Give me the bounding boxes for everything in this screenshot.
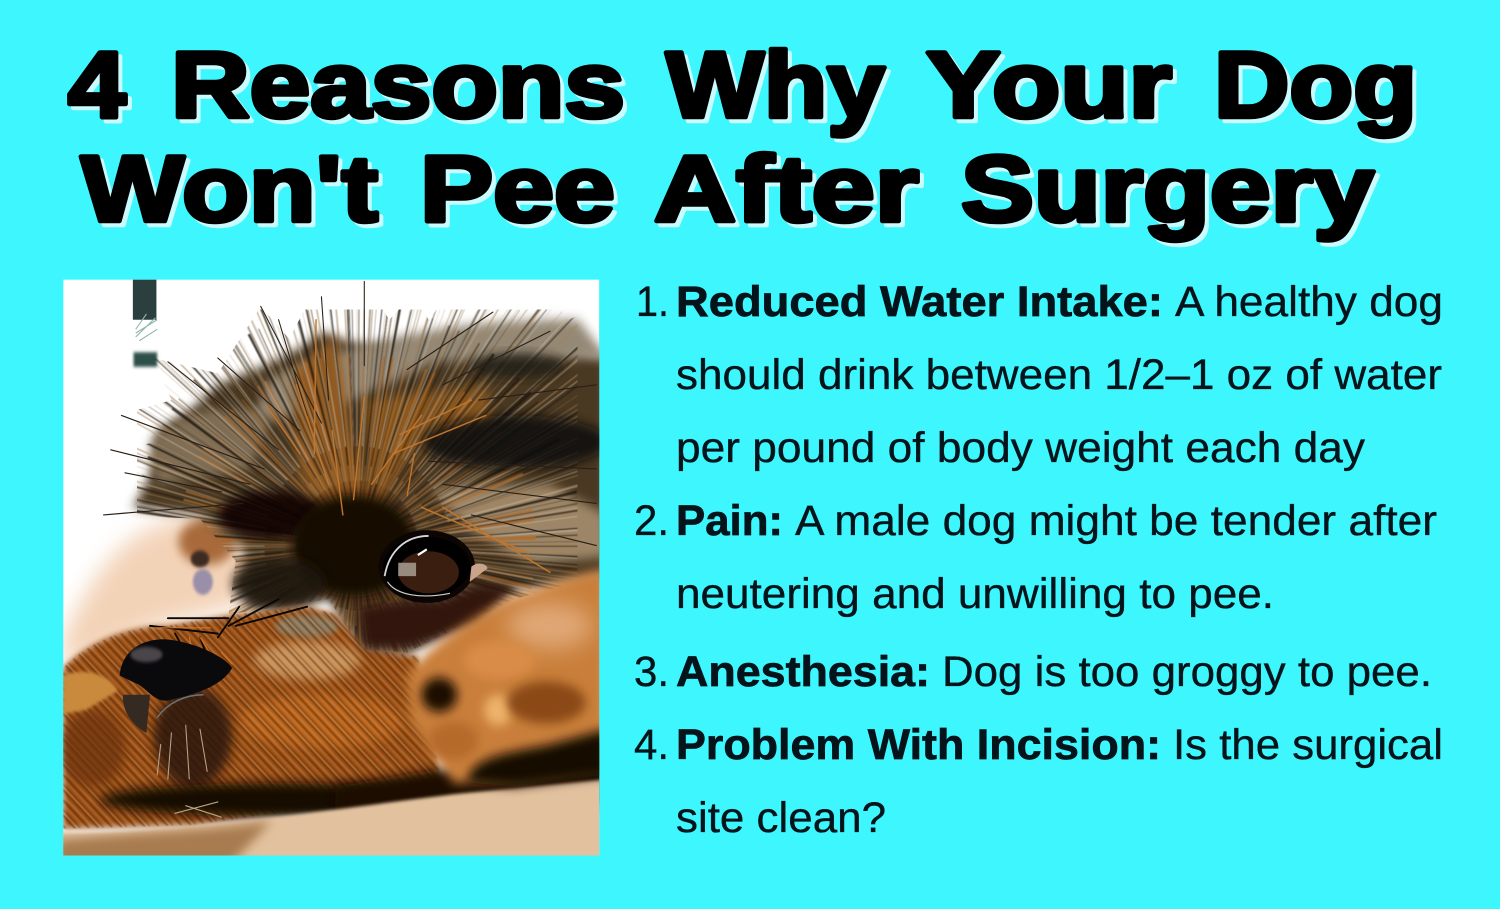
reason 3: Anesthesia: bbox=[676, 649, 930, 696]
title line 2: Pee bbox=[420, 136, 615, 241]
head fur mass bbox=[132, 331, 607, 653]
list of four reasons bbox=[634, 279, 1443, 842]
reason 3: 3. bbox=[634, 649, 669, 696]
muzzle shadows bbox=[154, 687, 232, 787]
title line 2: Pee bbox=[424, 140, 619, 245]
lighter top fur tint bbox=[250, 319, 607, 423]
rug bbox=[63, 778, 600, 856]
reason 4: 4. bbox=[634, 722, 669, 769]
title line 1: Your bbox=[926, 32, 1172, 137]
title line 2: After bbox=[654, 136, 919, 241]
title line 2 bbox=[81, 136, 1378, 245]
reason 3: Dog is too groggy to pee. bbox=[942, 649, 1432, 696]
title line 2: Won't bbox=[81, 136, 378, 241]
title line 2: Won't bbox=[85, 140, 382, 245]
title line 2: Surgery bbox=[965, 140, 1378, 245]
reason 4: Is the surgical bbox=[1173, 722, 1443, 769]
photo: close-up of a dog resting its head bbox=[57, 280, 607, 867]
reason 1: should drink between 1/2–1 oz of water bbox=[676, 352, 1442, 399]
radial fur texture bbox=[137, 310, 578, 652]
blurred paw bbox=[407, 568, 607, 787]
muzzle fur texture bbox=[63, 607, 443, 829]
reason 4: site clean? bbox=[676, 795, 886, 842]
reason 1: 1. bbox=[636, 279, 669, 326]
reason 2: 2. bbox=[634, 498, 669, 545]
title bbox=[68, 32, 1421, 245]
reason 2 bbox=[634, 498, 1437, 618]
title line 2: After bbox=[658, 140, 923, 245]
title line 1: Reasons bbox=[171, 32, 625, 137]
muzzle and cheek fur bbox=[63, 607, 443, 829]
shadow under the paw bbox=[334, 738, 600, 812]
reason 2: A male dog might be tender after bbox=[795, 498, 1437, 545]
title line 1: Dog bbox=[1218, 36, 1421, 141]
reason 2: Pain: bbox=[676, 498, 783, 545]
title line 1: Dog bbox=[1214, 32, 1417, 137]
blurred far ear and background fur bbox=[63, 515, 271, 668]
reason 2: neutering and unwilling to pee. bbox=[676, 571, 1274, 618]
dark post behind the dog bbox=[133, 280, 157, 367]
fur strands bbox=[104, 281, 596, 572]
reason 4: Problem With Incision: bbox=[676, 722, 1161, 769]
reason 1 bbox=[636, 279, 1443, 472]
title line 1: Why bbox=[666, 32, 885, 137]
title line 1: 4 bbox=[68, 32, 126, 137]
reason 1: per pound of body weight each day bbox=[676, 425, 1366, 472]
reason 1: Reduced Water Intake: bbox=[676, 279, 1163, 326]
muzzle fur strands bbox=[150, 599, 307, 817]
reason 3 bbox=[634, 649, 1432, 696]
reason 1: A healthy dog bbox=[1175, 279, 1443, 326]
nose bbox=[120, 639, 232, 733]
title line 1: Your bbox=[930, 36, 1176, 141]
eye bbox=[357, 530, 514, 649]
title line 2: Surgery bbox=[961, 136, 1374, 241]
muzzle light highlight bbox=[254, 641, 361, 679]
title line 1: Why bbox=[670, 36, 889, 141]
tan streak patches bbox=[286, 330, 370, 506]
title line 1: 4 bbox=[72, 36, 130, 141]
title line 1: Reasons bbox=[175, 36, 629, 141]
title line 1 bbox=[68, 32, 1421, 141]
dark fur shadows bbox=[218, 353, 607, 611]
reason 4 bbox=[634, 722, 1443, 842]
